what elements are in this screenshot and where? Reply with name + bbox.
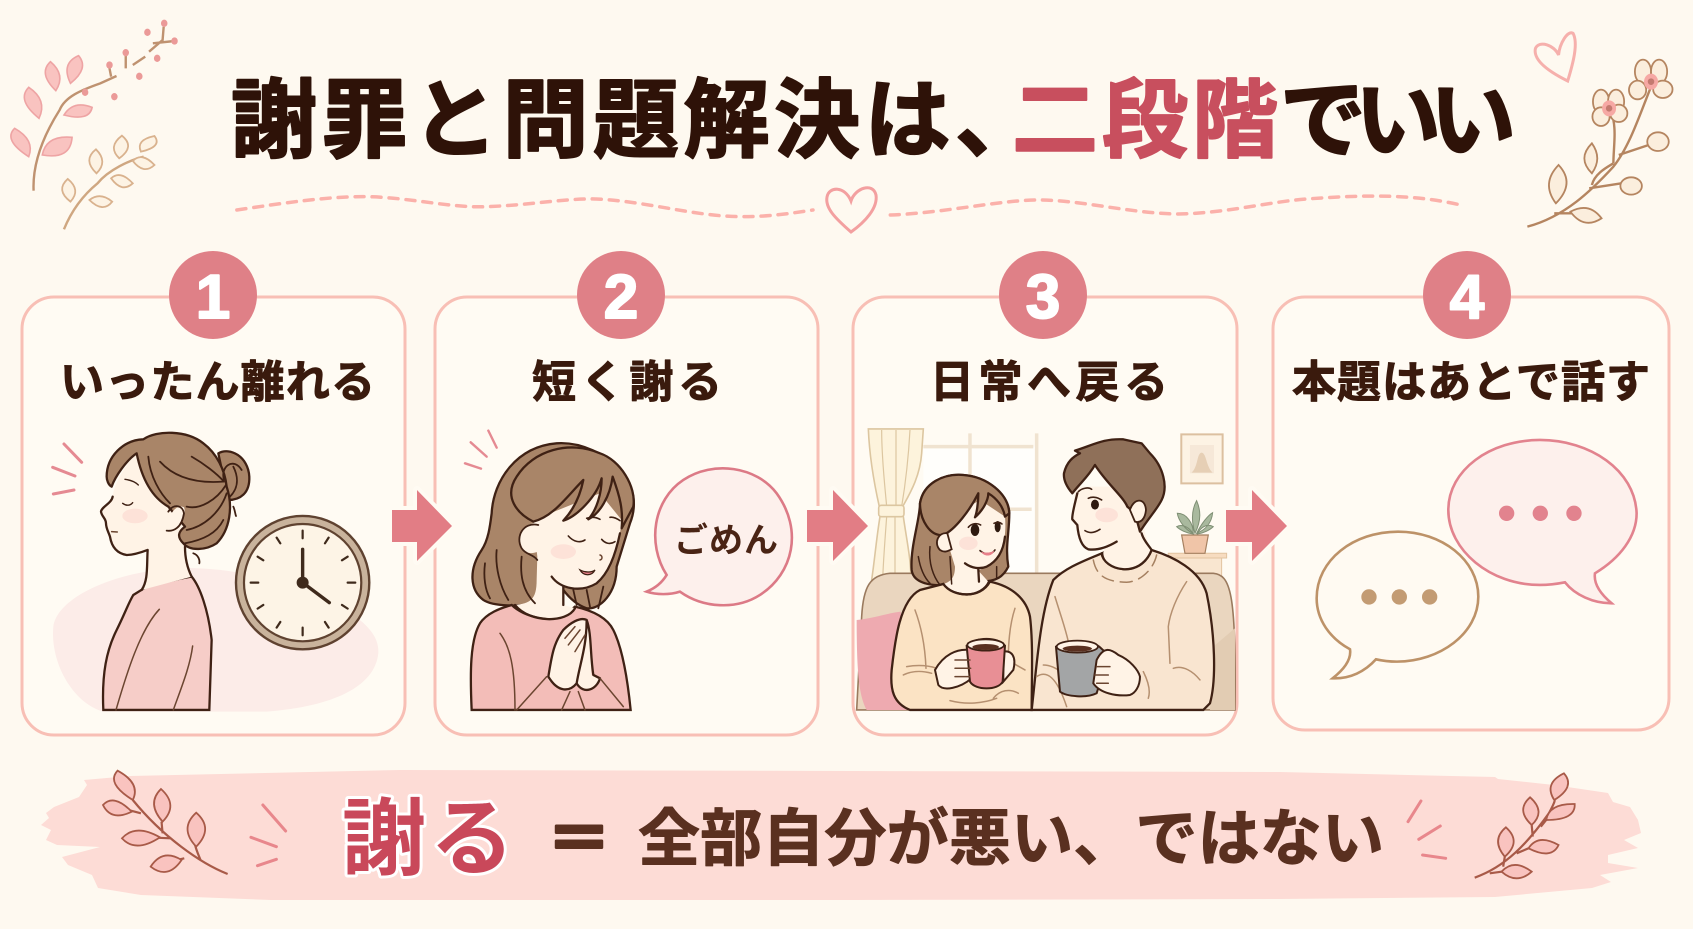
banner message: 謝る	[342, 792, 514, 886]
badge: number 1	[169, 251, 257, 339]
panel: step 3	[853, 251, 1237, 735]
title: でいい	[1280, 73, 1516, 169]
badge: number 4	[1423, 251, 1511, 339]
badge: number 2: 2	[604, 263, 638, 332]
title: 二段階	[1012, 73, 1278, 169]
illustration: woman apologising	[465, 431, 634, 710]
icon: banner right branch and rays	[1408, 773, 1575, 878]
banner message: 全部自分が悪い、ではない	[638, 805, 1384, 874]
panel: step 2	[435, 251, 818, 735]
heading: step 4: 本題はあとで話す	[1292, 358, 1650, 407]
callout: speech bubble ごめん	[647, 468, 792, 605]
title: 謝罪と問題解決は、	[231, 73, 1041, 169]
banner: brush stroke background	[41, 770, 1641, 900]
panel: step 4	[1273, 251, 1669, 730]
icon: top left pink and beige branches	[11, 20, 178, 229]
callout: speech bubble ごめん: ごめん	[674, 522, 778, 560]
illustration: woman in profile with clock	[53, 433, 378, 712]
badge: number 3	[999, 251, 1087, 339]
dashed divider with heart	[237, 188, 1464, 232]
heading: step 2: 短く謝る	[532, 358, 722, 407]
badge: number 2	[577, 251, 665, 339]
banner message	[342, 792, 1384, 886]
icon: brown speech bubble	[1317, 532, 1478, 678]
man	[1032, 439, 1214, 710]
icon: pink speech bubble	[1448, 440, 1637, 603]
arrow: step 1 to 2	[392, 490, 452, 561]
heading: step 1: いったん離れる	[60, 358, 375, 407]
arrow: step 3 to 4	[1226, 490, 1287, 561]
banner message: ＝	[547, 804, 611, 876]
illustration: couple on a sofa with mugs	[857, 429, 1235, 710]
arrow: step 2 to 3	[807, 490, 868, 561]
badge: number 1: 1	[196, 263, 230, 332]
panel: step 1	[22, 251, 405, 735]
title	[231, 73, 1516, 169]
heading: step 3: 日常へ戻る	[930, 358, 1168, 407]
badge: number 3: 3	[1026, 263, 1060, 332]
icon: top right heart and flower branch	[1527, 33, 1673, 227]
icon: banner left branch and rays	[103, 771, 286, 874]
badge: number 4: 4	[1450, 263, 1485, 332]
woman	[891, 475, 1032, 710]
